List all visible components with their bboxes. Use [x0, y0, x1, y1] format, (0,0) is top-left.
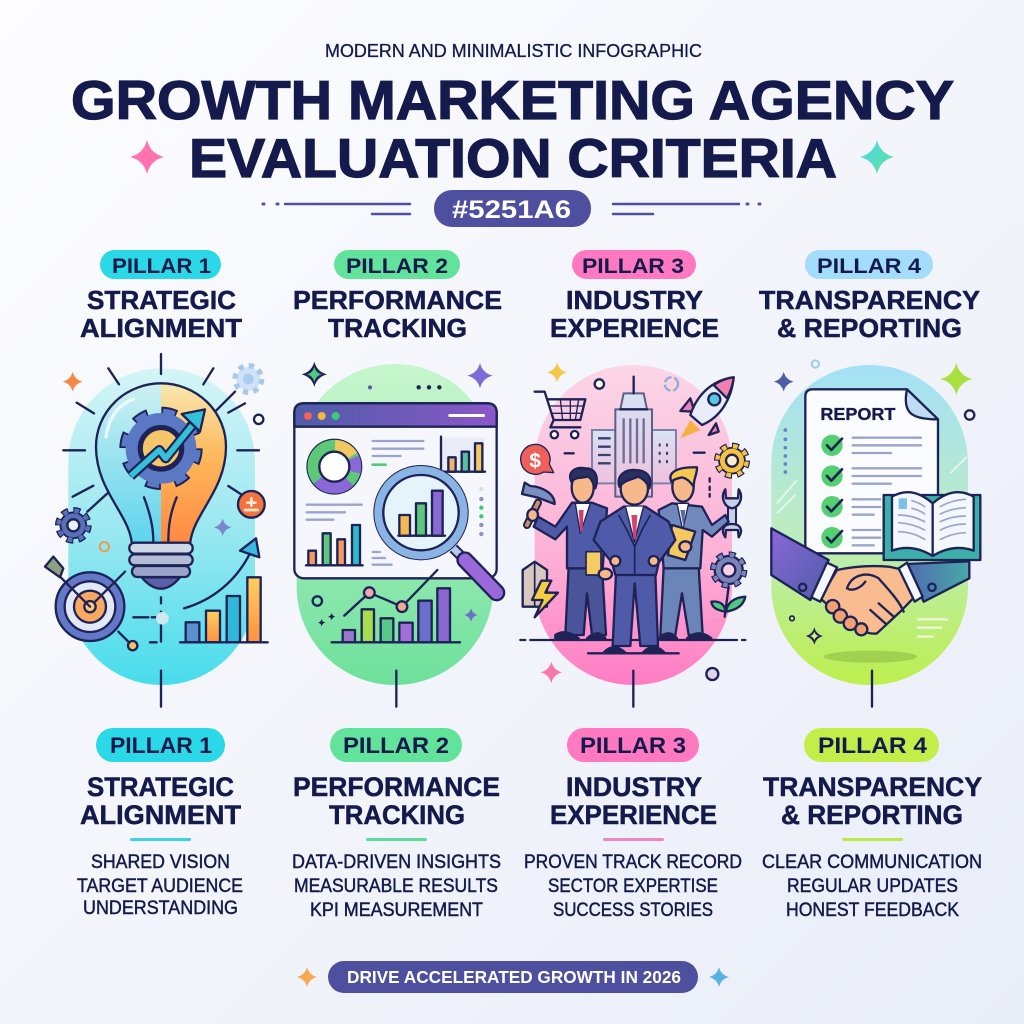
pillar 2 details: TRACKING — [329, 800, 465, 830]
pillar 2 label — [293, 250, 502, 343]
pillar 4 details: PILLAR 4 — [818, 733, 928, 758]
figure: centre person — [588, 470, 679, 653]
pillar 3 label — [550, 250, 719, 343]
bar chart with arrow — [180, 538, 268, 642]
hex colour pill — [434, 190, 591, 227]
title: GROWTH MARKETING AGENCY — [71, 69, 954, 131]
pillar 2 label: TRACKING — [328, 313, 467, 343]
pillar 1 label: PILLAR 1 — [112, 255, 211, 278]
icon: hammer — [522, 483, 555, 525]
pillar 4 details: HONEST FEEDBACK — [786, 900, 959, 921]
oval backdrop — [68, 368, 255, 685]
top pillar labels — [80, 250, 980, 343]
icon: light bulb — [96, 383, 226, 589]
illustration: strategic alignment — [45, 354, 268, 707]
pillar 2 details: PERFORMANCE — [293, 772, 500, 802]
pillar 3 details: INDUSTRY — [566, 772, 702, 802]
pillar 4 details — [762, 728, 982, 921]
icon: city buildings — [592, 377, 676, 497]
pillar 2 details: PILLAR 2 — [343, 733, 449, 758]
pillar 1 details: PILLAR 1 — [110, 733, 212, 758]
icon: gear with growth arrow — [126, 409, 205, 484]
pillar 1 label — [80, 250, 242, 343]
title — [71, 69, 954, 189]
pillar 1 details: UNDERSTANDING — [83, 898, 238, 919]
pillar 2 details: MEASURABLE RESULTS — [294, 876, 498, 897]
illustration: industry experience — [520, 362, 747, 707]
oval backdrop — [297, 364, 493, 685]
icon: handshake — [771, 528, 969, 635]
eyebrow text: MODERN AND MINIMALISTIC INFOGRAPHIC — [325, 41, 702, 61]
pillar 4 details: TRANSPARENCY — [763, 772, 982, 802]
pillar 2 details — [292, 728, 501, 921]
pillar 4 label: TRANSPARENCY — [759, 285, 980, 315]
donut chart — [305, 437, 364, 496]
footer banner — [297, 961, 729, 993]
icon: magnifying glass — [373, 465, 497, 593]
icon: target with arrow — [45, 557, 137, 650]
pillar 3 details: PROVEN TRACK RECORD — [524, 852, 742, 873]
pillar 4 details: & REPORTING — [781, 800, 963, 830]
icon: coin — [238, 491, 265, 518]
pillar 1 details: STRATEGIC — [87, 772, 234, 802]
icon: blue gear — [59, 511, 88, 540]
illustration: performance tracking — [294, 362, 497, 707]
footer banner: DRIVE ACCELERATED GROWTH IN 2026 — [347, 967, 681, 987]
icon: grey gear with sprout — [711, 555, 745, 617]
mini bar chart left — [306, 525, 363, 565]
pillar 1 details — [77, 728, 243, 919]
pillar 4 label: & REPORTING — [777, 313, 962, 343]
pillar 2 details: DATA-DRIVEN INSIGHTS — [292, 852, 501, 873]
pillar 3 details: SUCCESS STORIES — [553, 900, 713, 921]
pillar 3 label: EXPERIENCE — [550, 313, 719, 343]
pillar 4 details: REGULAR UPDATES — [787, 876, 958, 897]
illustration: transparency and reporting — [771, 360, 980, 707]
figure: left person — [527, 468, 612, 638]
pillar 3 details — [524, 728, 742, 921]
oval backdrop — [535, 365, 732, 685]
document: report: REPORT — [820, 404, 896, 424]
dashboard window — [294, 403, 497, 578]
hex colour pill: #5251A6 — [452, 196, 571, 224]
document: report — [805, 389, 938, 553]
icon: yellow gear — [717, 446, 747, 475]
oval backdrop — [771, 365, 968, 685]
pillar 2 details: KPI MEASUREMENT — [310, 900, 483, 921]
pillar 1 details: SHARED VISION — [91, 852, 230, 873]
icon: pink sparkle — [130, 140, 164, 174]
icon: dollar speech bubble — [521, 444, 554, 474]
lower bar and line chart — [332, 570, 460, 642]
pillar 1 details: ALIGNMENT — [80, 800, 242, 830]
icon: rocket — [680, 377, 734, 438]
icon: teal sparkle — [860, 140, 894, 174]
icon: shopping cart — [535, 392, 585, 438]
pillar 1 details: TARGET AUDIENCE — [77, 876, 243, 897]
pillar 4 label: PILLAR 4 — [817, 255, 921, 278]
icon: wrench — [723, 489, 741, 537]
pillar 3 details: PILLAR 3 — [580, 733, 686, 758]
mini bar chart top — [441, 437, 485, 472]
pillar 3 label: PILLAR 3 — [582, 255, 684, 278]
pillar 4 details: CLEAR COMMUNICATION — [762, 852, 982, 873]
lower pillar blocks — [77, 728, 982, 921]
icon: dollar speech bubble: $ — [529, 449, 541, 472]
pillar 2 label: PILLAR 2 — [346, 255, 448, 278]
pillar 3 label: INDUSTRY — [566, 285, 703, 315]
icon: box with lightning — [523, 562, 558, 617]
pillar 4 label — [759, 250, 980, 343]
pillar 1 label: STRATEGIC — [87, 285, 236, 315]
pillar 3 details: SECTOR EXPERTISE — [548, 876, 718, 897]
pillar 1 label: ALIGNMENT — [80, 313, 242, 343]
pillar 3 details: EXPERIENCE — [550, 800, 717, 830]
figure: right person — [659, 467, 729, 638]
header — [71, 41, 954, 227]
title: EVALUATION CRITERIA — [189, 127, 837, 189]
icon: orange sparkle — [63, 372, 83, 392]
icon: open book — [884, 492, 980, 560]
pillar 2 label: PERFORMANCE — [293, 285, 502, 315]
icon: pale gear — [235, 366, 262, 392]
